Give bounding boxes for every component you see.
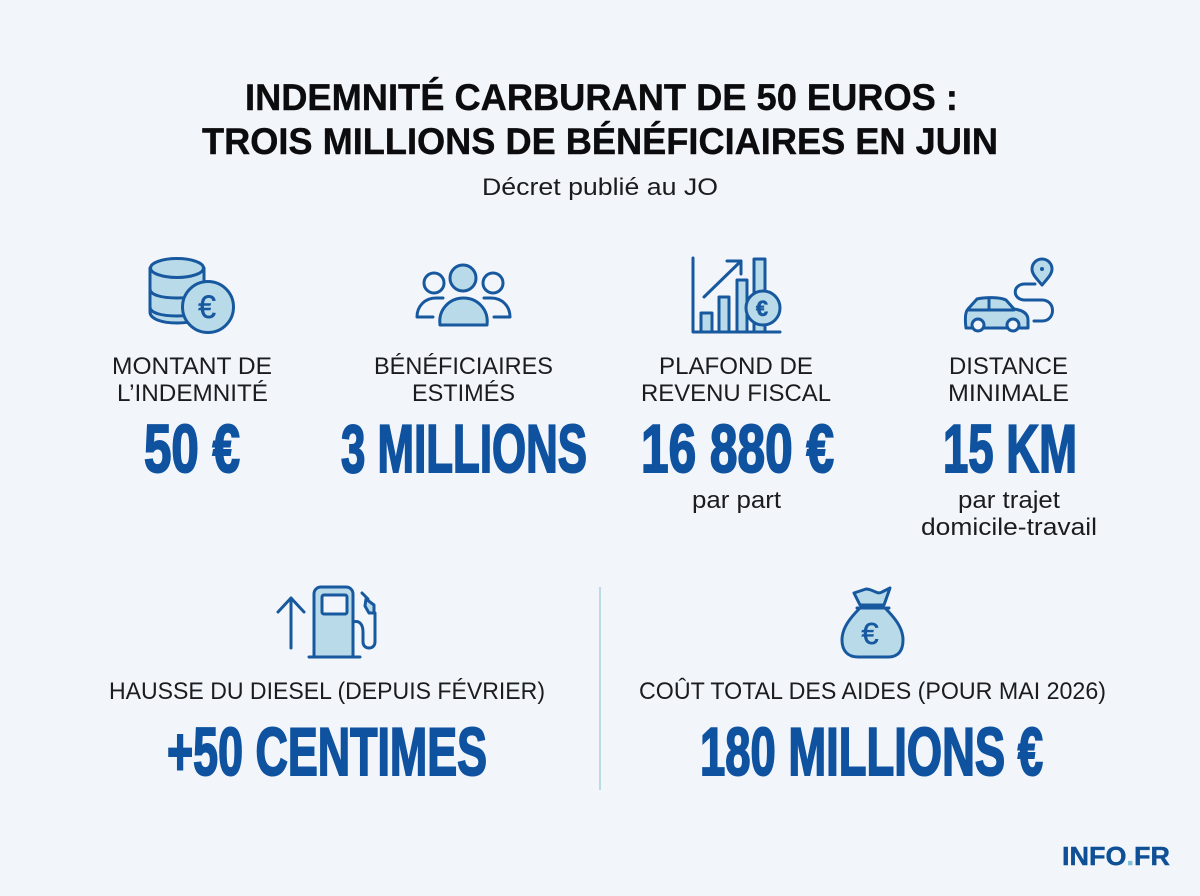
label [948, 353, 1069, 407]
note [921, 487, 1097, 541]
value: 180 MILLIONS € [700, 714, 1043, 790]
value: 16 880 € [641, 411, 834, 487]
note: par trajet [958, 487, 1060, 514]
label: MINIMALE [948, 380, 1069, 407]
label [641, 353, 831, 407]
label [374, 353, 553, 407]
label: L’INDEMNITÉ [117, 380, 268, 407]
label [112, 353, 272, 407]
panel: hausse du diesel [109, 587, 545, 790]
icon: rising bar chart with euro [693, 258, 780, 332]
label: BÉNÉFICIAIRES [374, 353, 553, 380]
label: MONTANT DE [112, 353, 272, 380]
icon: coin stack with euro [150, 258, 234, 332]
panel: distance minimale [921, 259, 1097, 541]
icon: group of people [417, 265, 510, 325]
panel: plafond de revenu fiscal [641, 258, 834, 514]
icon: money bag with euro [842, 588, 903, 657]
title [202, 77, 998, 162]
label: COÛT TOTAL DES AIDES (POUR MAI 2026) [639, 677, 1106, 705]
value: 50 € [144, 411, 240, 487]
subtitle: Décret publié au JO [482, 174, 718, 201]
label: PLAFOND DE [659, 353, 813, 380]
note: domicile-travail [921, 514, 1097, 541]
panel: coût total des aides [639, 588, 1106, 790]
icon: money bag with euro: € [861, 616, 879, 651]
icon: coin stack with euro: € [198, 289, 216, 325]
title: INDEMNITÉ CARBURANT DE 50 EUROS : [245, 77, 958, 118]
label: ESTIMÉS [412, 380, 515, 407]
label: DISTANCE [949, 353, 1068, 380]
icon: rising bar chart with euro: € [756, 296, 768, 321]
panel: montant de l'indemnité [112, 258, 272, 487]
divider [599, 587, 601, 790]
label: REVENU FISCAL [641, 380, 831, 407]
title: TROIS MILLIONS DE BÉNÉFICIAIRES EN JUIN [202, 121, 998, 162]
value: +50 CENTIMES [167, 714, 487, 790]
label: HAUSSE DU DIESEL (DEPUIS FÉVRIER) [109, 678, 545, 705]
value: 3 MILLIONS [341, 411, 587, 487]
logo: INFO.FR: INFO.FR [1062, 841, 1170, 871]
note: par part [692, 487, 781, 514]
value: 15 KM [943, 411, 1077, 487]
icon: fuel pump with up arrow [278, 587, 375, 657]
panel: bénéficiaires estimés [341, 265, 587, 487]
icon: car and route with pin [965, 259, 1052, 331]
